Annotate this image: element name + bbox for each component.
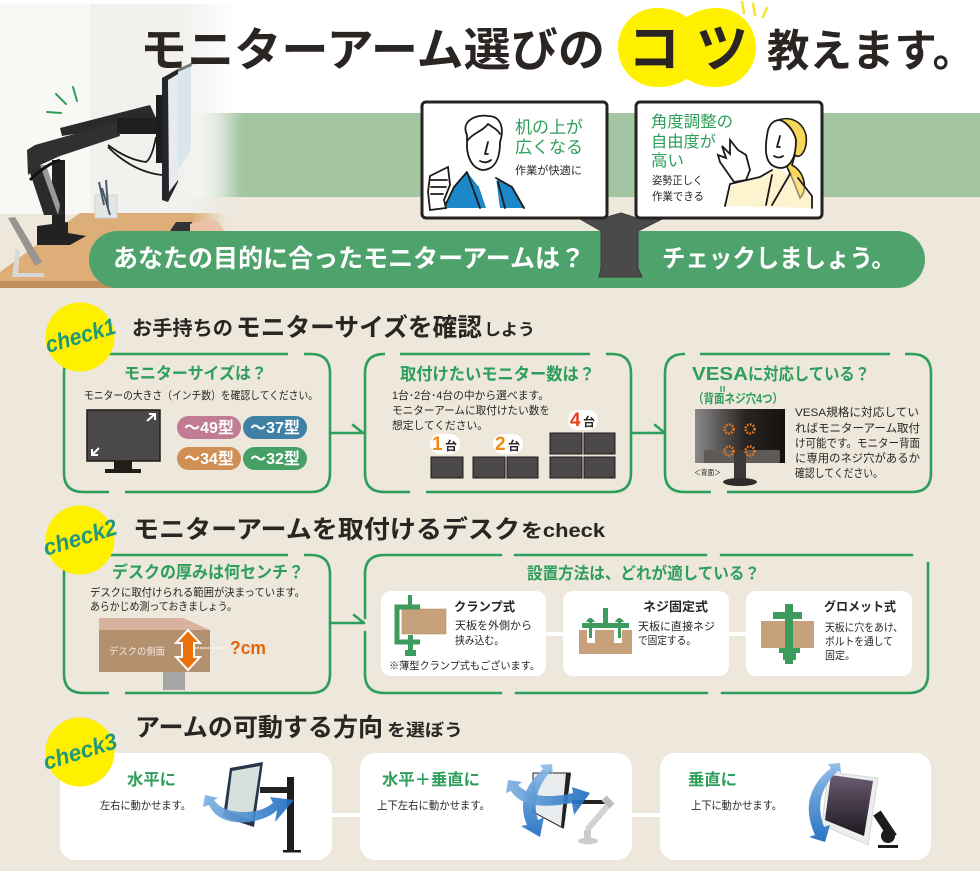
- card title: グロメット式: [824, 599, 896, 614]
- note: ※薄型クランプ式もございます。: [389, 659, 540, 672]
- panel: desk thickness: [64, 555, 330, 693]
- monitor card: woman: [636, 102, 822, 218]
- photo: horizontal movement: [203, 762, 301, 852]
- VESA description: [795, 405, 920, 480]
- text: comfortable: 作業が快適に: [515, 163, 582, 177]
- card: horizontal: [60, 753, 332, 860]
- label 2 monitors: [493, 434, 523, 455]
- card: vertical: [660, 753, 931, 860]
- illustration: desk side: [99, 618, 210, 690]
- size pill 34: ～34型: [184, 450, 234, 468]
- size pill 32: ～32型: [250, 450, 300, 468]
- panel title: 取付けたいモニター数は？: [400, 365, 595, 384]
- card text: 天板を外側から: [455, 618, 532, 632]
- badge: check 3: [40, 718, 120, 786]
- heading: check 2: モニターアームを取付けるデスク: [133, 515, 520, 544]
- panel title: VESA: [692, 364, 748, 384]
- card title: 垂直に: [688, 770, 737, 789]
- background: green band: [195, 113, 980, 197]
- monitor card: man: [422, 102, 607, 218]
- panel title: 設置方法は、どれが適している？: [527, 563, 760, 583]
- heading: check 2: をcheck: [521, 520, 605, 542]
- card title: 水平に: [127, 771, 176, 789]
- card: screw: [563, 591, 729, 676]
- label 2 monitors: 2: [495, 434, 506, 455]
- panel description: [392, 388, 550, 432]
- text: wider: 広くなる: [515, 138, 583, 157]
- card title: クランプ式: [454, 599, 515, 614]
- label 4 monitors: [568, 410, 598, 431]
- panel description: モニターアームに取付けたい数を: [392, 404, 550, 417]
- photo: dual monitor arm on desk: [0, 4, 236, 288]
- VESA description: 確認してください。: [795, 467, 883, 480]
- icon: screw fixing: [579, 608, 632, 654]
- VESA description: ればモニターアーム取付: [795, 422, 920, 435]
- icon: 2 monitors: [473, 457, 538, 478]
- panel description: 1台･2台･4台の中から選べます。: [392, 388, 549, 402]
- photo: vertical movement: [809, 763, 898, 848]
- photo: horizontal and vertical movement: [506, 764, 612, 844]
- green banner pill: [89, 231, 925, 288]
- card: horizontal and vertical: [360, 753, 632, 860]
- VESA description: け可能です。モニター背面: [795, 436, 920, 450]
- panel description: あらかじめ測っておきましょう。: [90, 599, 237, 613]
- title highlighted word: コツ: [628, 21, 748, 79]
- illustration: man with fist: [428, 116, 524, 210]
- size pill 34: [177, 447, 241, 470]
- icon: monitor with diagonal arrows: [87, 410, 160, 473]
- icon: orange double arrow: [176, 630, 200, 670]
- caption: back: ＜背面＞: [694, 467, 721, 477]
- card title: 水平＋垂直に: [382, 770, 480, 789]
- text: angle adjust: 角度調整の: [651, 113, 733, 131]
- badge: check 1: check1: [42, 313, 119, 358]
- equals mark: [721, 386, 724, 392]
- card text: [825, 620, 903, 662]
- badge: check 2: check2: [40, 514, 120, 561]
- card text: 上下左右に動かせます。: [377, 798, 490, 812]
- card text: 固定。: [825, 649, 855, 662]
- heading: check 1: お手持ちの: [132, 317, 233, 340]
- card text: [455, 618, 532, 647]
- panel title: に対応している？: [748, 365, 870, 384]
- card text: 挟み込む。: [455, 633, 504, 647]
- panel subtitle: （背面ネジ穴4つ）: [693, 391, 783, 406]
- card text: [638, 619, 715, 647]
- size pill 37: ～37型: [250, 419, 300, 437]
- label 4 monitors: 台: [583, 414, 595, 429]
- banner action text: チェックしましょう。: [662, 245, 895, 273]
- icon: monitor back with VESA holes: [695, 409, 785, 486]
- label 4 monitors: 4: [570, 410, 581, 431]
- card: clamp: [381, 591, 546, 676]
- badge: check 3: check3: [40, 728, 120, 775]
- dotted leader: [195, 647, 228, 649]
- label 2 monitors: 台: [508, 438, 520, 453]
- panel title: デスクの厚みは何センチ？: [112, 562, 304, 582]
- text: can work: 作業できる: [652, 190, 704, 203]
- panel description: 想定してください。: [392, 418, 488, 432]
- arrow: panel 2 to 3: [631, 425, 665, 433]
- text: more desk space: 机の上が: [515, 118, 583, 137]
- label: question cm: ?cm: [230, 638, 266, 658]
- card text: ボルトを通して: [825, 635, 893, 648]
- card: grommet: [746, 591, 912, 676]
- heading: check 3: アームの可動する方向: [135, 714, 383, 742]
- arrow: panel 1 to 2: [330, 425, 363, 433]
- panel: number of monitors: [365, 354, 631, 492]
- heading: check 1: モニターサイズを確認: [236, 313, 482, 342]
- panel: monitor size: [64, 354, 330, 492]
- badge: check 2: [40, 506, 120, 574]
- label 1 monitor: 台: [445, 438, 457, 453]
- connector between cards: [546, 632, 746, 636]
- VESA description: VESA規格に対応してい: [795, 405, 919, 419]
- card text: 左右に動かせます。: [100, 798, 191, 812]
- size pill 37: [243, 416, 307, 439]
- heading: check 1: [132, 313, 535, 342]
- panel description: デスクに取付けられる範囲が決まっています。: [90, 585, 305, 599]
- text: good posture: 姿勢正しく: [652, 173, 703, 187]
- size pill 32: [243, 447, 307, 470]
- text: freedom: 自由度が: [651, 133, 716, 151]
- highlight blob behind コツ: [618, 8, 756, 87]
- size pill 49: ～49型: [184, 419, 234, 437]
- icon: 1 monitor: [431, 457, 463, 478]
- panel title: [692, 364, 870, 384]
- card text: 天板に穴をあけ、: [825, 620, 903, 634]
- background: beige page area: [0, 197, 980, 871]
- title text right: 教えます。: [767, 27, 975, 76]
- title text left: モニターアーム選びの: [140, 24, 605, 76]
- card text: 天板に直接ネジ: [638, 619, 715, 633]
- card text: で固定する。: [638, 634, 696, 647]
- icon: 4 monitors: [550, 433, 615, 478]
- card text: 上下に動かせます。: [691, 798, 782, 812]
- illustration: woman with OK sign: [718, 119, 812, 208]
- monitor stand graphic: [580, 213, 662, 277]
- label 1 monitor: [430, 434, 460, 455]
- panel description: モニターの大きさ（インチ数）を確認してください。: [84, 388, 318, 402]
- panel description: [90, 585, 305, 613]
- heading: check 3: を選ぼう: [387, 721, 463, 740]
- icon: clamp: [397, 595, 446, 656]
- title: [140, 2, 975, 87]
- arrow: panel desk to installation: [330, 615, 364, 623]
- connector between direction cards: [332, 813, 660, 817]
- panel: VESA: [665, 354, 931, 492]
- text: high: 高い: [651, 152, 684, 170]
- badge: check 1: [42, 302, 119, 372]
- VESA description: に専用のネジ穴があるか: [795, 451, 920, 465]
- sparkle ticks: [742, 2, 767, 17]
- size pill 49: [177, 416, 241, 439]
- heading: check 1: しよう: [484, 321, 535, 339]
- panel title: モニターサイズは？: [124, 363, 267, 383]
- card title: ネジ固定式: [643, 599, 709, 614]
- panel: installation method: [365, 555, 928, 693]
- banner question text: あなたの目的に合ったモニターアームは？: [113, 245, 585, 273]
- icon: grommet: [761, 604, 814, 664]
- label: desk side: デスクの側面: [109, 645, 165, 658]
- label 1 monitor: 1: [432, 434, 443, 455]
